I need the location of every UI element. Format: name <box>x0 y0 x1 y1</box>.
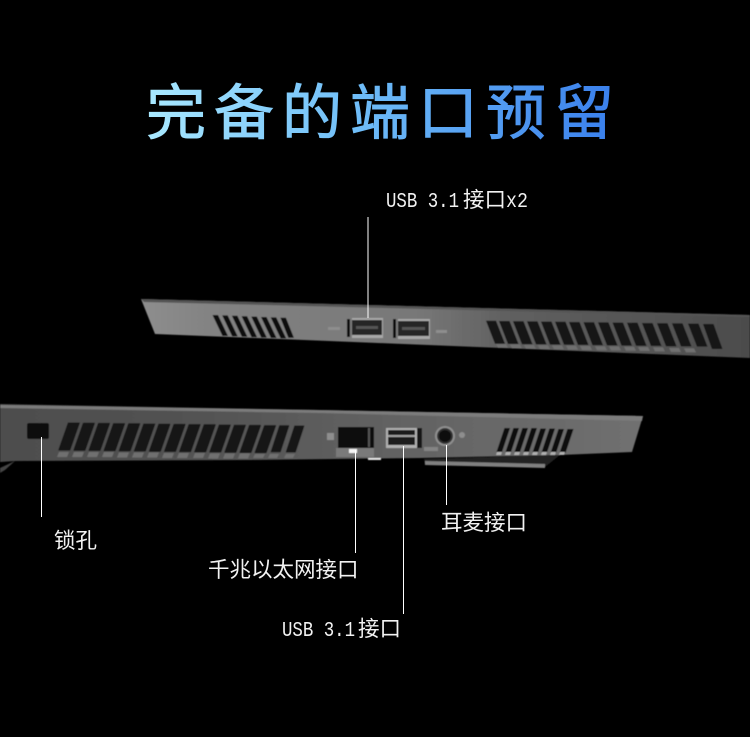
label: USB 3.1: 接口 <box>358 617 401 641</box>
laptop rear edge with two USB ports <box>141 299 750 358</box>
lock slot <box>27 423 49 439</box>
ethernet port <box>327 427 381 460</box>
USB port 2 <box>393 319 430 339</box>
label: gigabit ethernet: 千兆以太网接口 <box>208 558 359 582</box>
short side vent <box>496 428 574 455</box>
USB port 1 <box>347 318 383 338</box>
small rear vent <box>212 315 294 338</box>
label: USB 3.1 x2: USB 3.1 <box>386 191 459 214</box>
USB port <box>386 428 438 451</box>
USB symbols <box>328 327 340 330</box>
long side vent <box>57 423 304 458</box>
label: USB 3.1 x2: x2 <box>506 191 528 214</box>
laptop side edge with ports <box>0 404 643 473</box>
label: USB 3.1 x2 <box>386 188 528 214</box>
leader line: headset <box>446 445 447 505</box>
label: USB 3.1 <box>282 617 401 643</box>
label: headset: 耳麦接口 <box>441 511 527 535</box>
leader line: USB 3.1 <box>403 446 404 614</box>
leader line: lock <box>41 437 42 517</box>
label: USB 3.1: USB 3.1 <box>282 620 355 643</box>
label: lock: 锁孔 <box>54 529 97 553</box>
large rear vent <box>486 321 722 352</box>
title: 完备的端口预留 <box>146 65 614 152</box>
hinge strip <box>424 455 560 467</box>
leader line: ethernet <box>355 450 356 553</box>
audio jack <box>435 426 465 446</box>
label: USB 3.1 x2: 接口 <box>463 188 506 212</box>
leader line: USB 3.1 x2 <box>368 217 369 318</box>
